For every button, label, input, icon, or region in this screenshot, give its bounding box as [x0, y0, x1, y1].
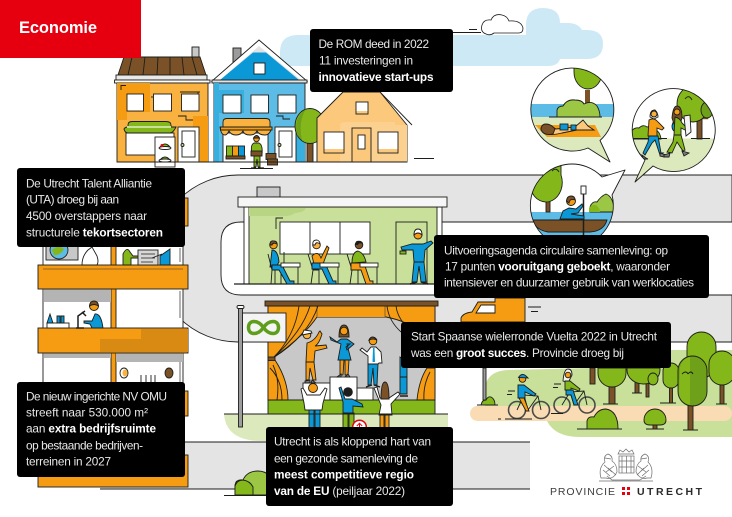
road: upper C-shaped road	[155, 175, 732, 342]
theatre stage	[224, 301, 448, 441]
crest	[599, 449, 653, 481]
hiker orange	[650, 110, 658, 119]
callout: competitive region: Utrecht is als kloppend hart van	[274, 434, 431, 448]
house: tan	[117, 92, 434, 162]
top bar	[265, 301, 438, 306]
cyclist green	[551, 369, 595, 414]
student 1	[268, 241, 300, 284]
street tree	[295, 108, 325, 162]
curtains	[268, 306, 435, 400]
two colleagues with document	[123, 249, 170, 265]
callout: Utrecht Talent Alliantie: structurele tekortsectoren	[26, 226, 163, 240]
logo: Provincie Utrecht: PROVINCIE	[550, 486, 615, 498]
callout: NV OMU: op bestaande bedrijven-	[26, 438, 143, 452]
callout: competitive region	[266, 427, 453, 506]
student 2	[308, 240, 339, 284]
callout: Vuelta: was een groot succes. Provincie droeg bij	[410, 346, 624, 360]
callout: NV OMU: terreinen in 2027	[26, 454, 111, 468]
whiteboard	[280, 222, 370, 254]
scientist in white coat	[82, 247, 98, 265]
callout: Utrecht Talent Alliantie	[17, 168, 185, 247]
callout: circular agenda: intensiever en duurzamer gebruik van werklocaties	[444, 276, 694, 290]
road: lower road	[100, 442, 530, 489]
callout: circular agenda	[434, 235, 709, 298]
speech bubble: hikers	[632, 88, 716, 182]
speech bubble: beach	[530, 68, 614, 162]
audience member 1	[301, 384, 327, 429]
central green office	[234, 187, 447, 284]
student 3	[347, 241, 378, 284]
speech bubble: boat	[530, 164, 626, 235]
title: Economie: Economie	[19, 19, 97, 37]
globe poster	[46, 241, 78, 260]
background clouds	[280, 8, 603, 66]
lab scene with microscope	[47, 301, 103, 328]
audience member 3	[374, 382, 400, 428]
shopkeeper	[240, 136, 273, 168]
audience member 2	[339, 387, 363, 429]
callout: Utrecht Talent Alliantie: 4500 overstappers naar	[26, 209, 147, 223]
door	[396, 222, 427, 284]
house: orange	[114, 47, 210, 162]
callout: Vuelta: Start Spaanse wielerronde Vuelta 2022 in Utrecht	[411, 330, 658, 344]
callout: Utrecht Talent Alliantie: (UTA) droeg bij aan	[26, 192, 119, 206]
person behind speech box	[400, 357, 408, 396]
callout: ROM investments: 11 investeringen in	[319, 54, 413, 68]
podium	[303, 377, 373, 400]
title: Economie	[0, 0, 141, 58]
callout: Vuelta	[401, 322, 671, 368]
person on podium: woman	[330, 325, 354, 377]
hiker green	[672, 122, 674, 132]
callout: ROM investments	[310, 29, 453, 92]
pale green ground	[224, 414, 448, 441]
menu sign	[155, 137, 175, 167]
cyclist blue	[498, 374, 550, 419]
callout: competitive region: van de EU (peiljaar 2022)	[274, 484, 405, 498]
callout: NV OMU	[17, 382, 185, 477]
bushes	[577, 409, 666, 429]
callout: NV OMU: aan extra bedrijfsruimte	[26, 422, 156, 436]
logo: Provincie Utrecht: UTRECHT	[637, 486, 703, 498]
red arrow badge	[353, 420, 366, 434]
callout: NV OMU: De nieuw ingerichte NV OMU	[26, 390, 167, 404]
small bush	[481, 397, 495, 405]
callout: competitive region: een gezonde samenleving de	[274, 452, 418, 466]
callout: ROM investments: innovatieve start-ups	[318, 70, 434, 84]
park with trees and cyclists	[470, 332, 732, 437]
callout: NV OMU: streeft naar 530.000 m²	[26, 406, 148, 420]
house: blue	[212, 40, 307, 162]
teacher	[400, 229, 433, 284]
callout: Utrecht Talent Alliantie: De Utrecht Talent Alliantie	[26, 176, 152, 190]
callout: circular agenda: 17 punten vooruitgang geboekt, waaronder	[445, 260, 670, 274]
person on podium: orange	[302, 330, 327, 383]
flag with circular economy symbol	[237, 306, 286, 427]
logo: Provincie Utrecht	[550, 449, 703, 498]
left office building	[38, 198, 188, 487]
bush lower road	[224, 471, 270, 496]
truck	[461, 298, 541, 322]
callout: ROM investments: De ROM deed in 2022	[318, 37, 429, 51]
people heads ground floor	[120, 368, 173, 382]
vegetable stall and boxes	[226, 146, 278, 165]
callout: circular agenda: Uitvoeringsagenda circulaire samenleving: op	[444, 244, 668, 258]
pole	[483, 368, 486, 400]
tree row	[590, 332, 732, 430]
callout: competitive region: meest competitieve regio	[274, 468, 414, 482]
person on podium: man in white shirt	[360, 337, 382, 387]
